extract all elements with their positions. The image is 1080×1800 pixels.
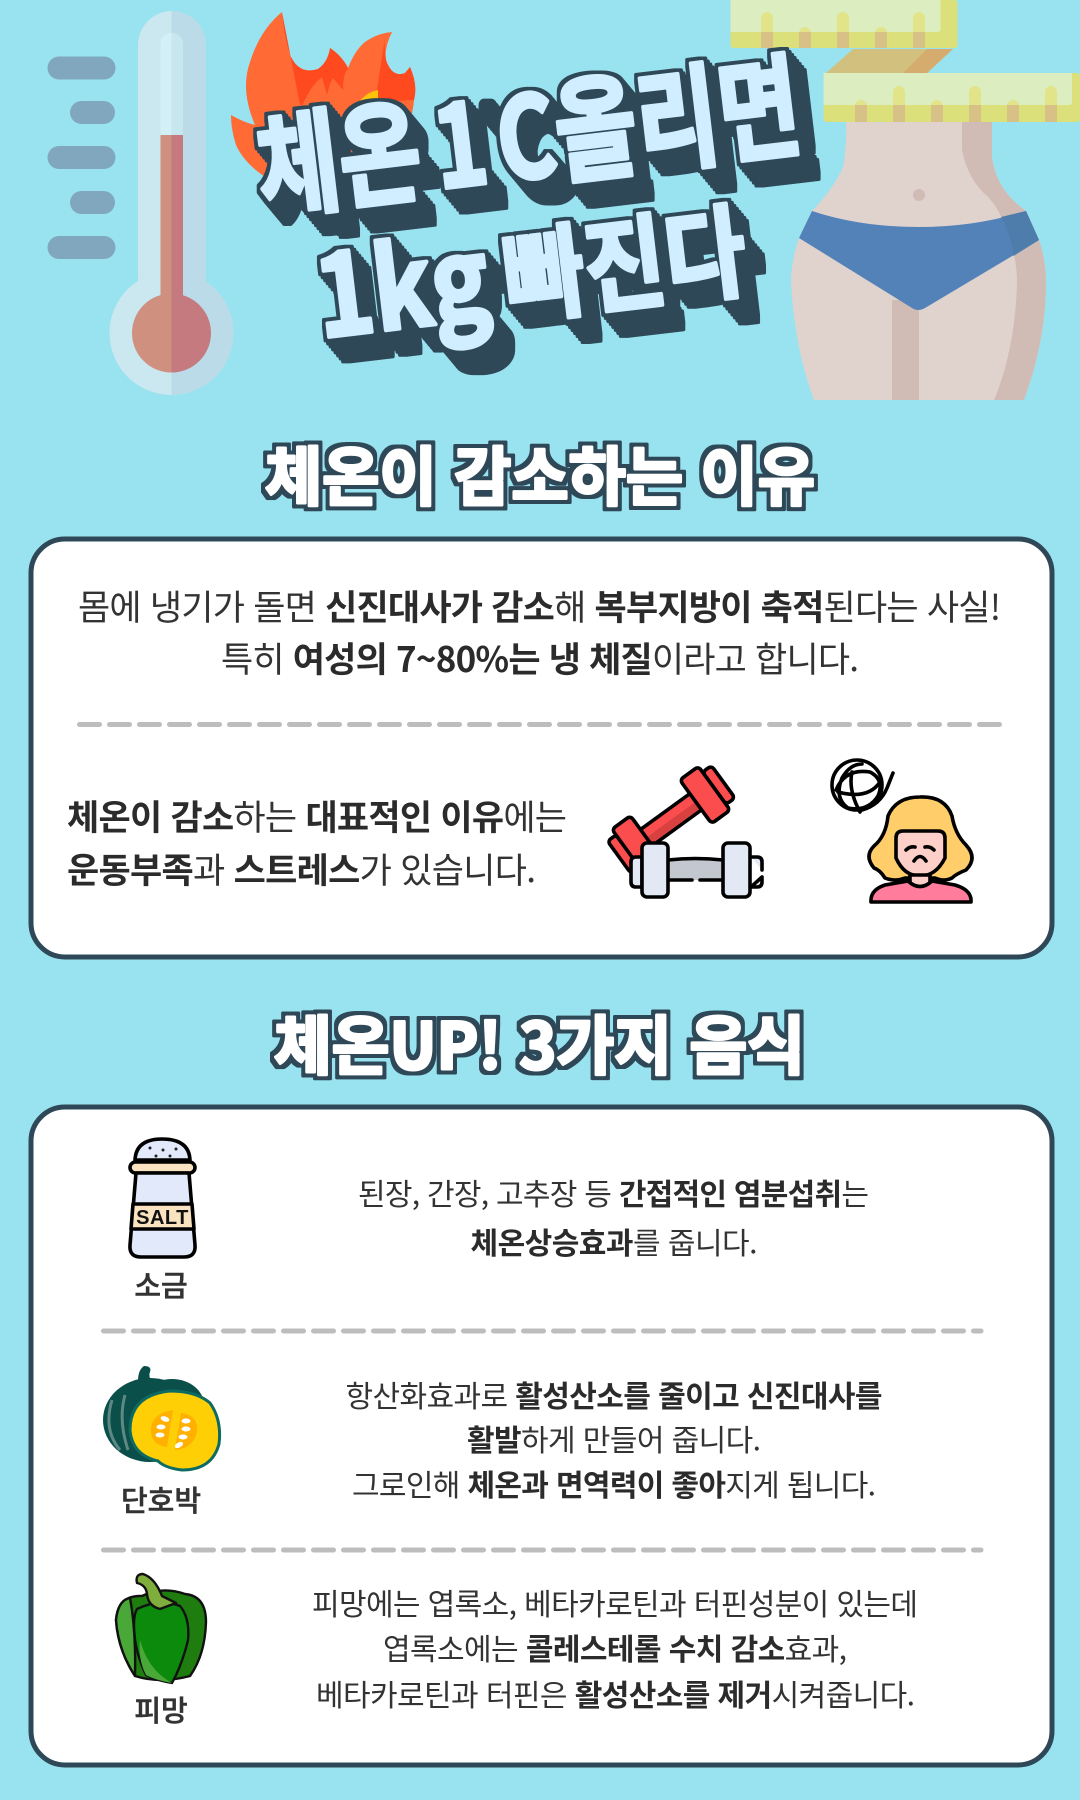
title (247, 15, 824, 376)
text block: intro: 특히 여성의 7~80%는 냉 체질이라고 합니다. (221, 632, 859, 683)
food row: pumpkin (103, 1366, 882, 1520)
description: salt (358, 1170, 869, 1263)
panel: foods (31, 1107, 1052, 1765)
food row: salt (130, 1139, 869, 1305)
description: pumpkin (346, 1372, 882, 1505)
heading: foods: 체온UP! 3가지 음식 (274, 996, 805, 1088)
icon: salt shaker: SALT (136, 1207, 189, 1229)
description: salt: 체온상승효과를 줍니다. (470, 1219, 758, 1263)
panel: reasons (31, 539, 1052, 957)
title: 체온 1 (247, 45, 556, 243)
description: pepper: 피망에는 엽록소, 베타카로틴과 터핀성분이 있는데 (312, 1580, 918, 1624)
text block: main reasons (67, 790, 567, 894)
food row: pepper (116, 1574, 918, 1730)
icon: green pepper (116, 1574, 206, 1683)
label: salt: 소금 (134, 1263, 188, 1305)
description: pepper: 엽록소에는 콜레스테롤 수치 감소효과, (383, 1625, 847, 1669)
title: 1kg 빠진다 (305, 157, 754, 371)
text block: main reasons: 체온이 감소하는 대표적인 이유에는 (67, 790, 567, 841)
label: pepper: 피망 (134, 1688, 188, 1730)
description: salt: 된장, 간장, 고추장 등 간접적인 염분섭취는 (358, 1170, 869, 1214)
icon: waist with measuring tape (730, 0, 1080, 400)
icon: dumbbells (603, 760, 762, 897)
text block: intro (78, 580, 1001, 683)
icon: stressed woman (832, 760, 972, 902)
description: pumpkin: 그로인해 체온과 면역력이 좋아지게 됩니다. (352, 1461, 876, 1505)
icon: thermometer (48, 11, 234, 395)
label: pumpkin: 단호박 (121, 1478, 201, 1520)
title: C올리면 (486, 15, 808, 214)
title: ° (480, 91, 497, 141)
description: pepper: 베타카로틴과 터핀은 활성산소를 제거시켜줍니다. (316, 1671, 915, 1715)
description: pepper (312, 1580, 918, 1715)
description: pumpkin: 항산화효과로 활성산소를 줄이고 신진대사를 (346, 1372, 882, 1416)
icon: salt shaker (130, 1139, 195, 1257)
heading: reasons: 체온이 감소하는 이유 (265, 427, 815, 519)
description: pumpkin: 활발하게 만들어 줍니다. (467, 1416, 761, 1460)
icon: pumpkin (103, 1366, 220, 1470)
icon: flames (231, 12, 415, 180)
text block: main reasons: 운동부족과 스트레스가 있습니다. (67, 843, 536, 894)
text block: intro: 몸에 냉기가 돌면 신진대사가 감소해 복부지방이 축적된다는 사실! (78, 580, 1001, 631)
